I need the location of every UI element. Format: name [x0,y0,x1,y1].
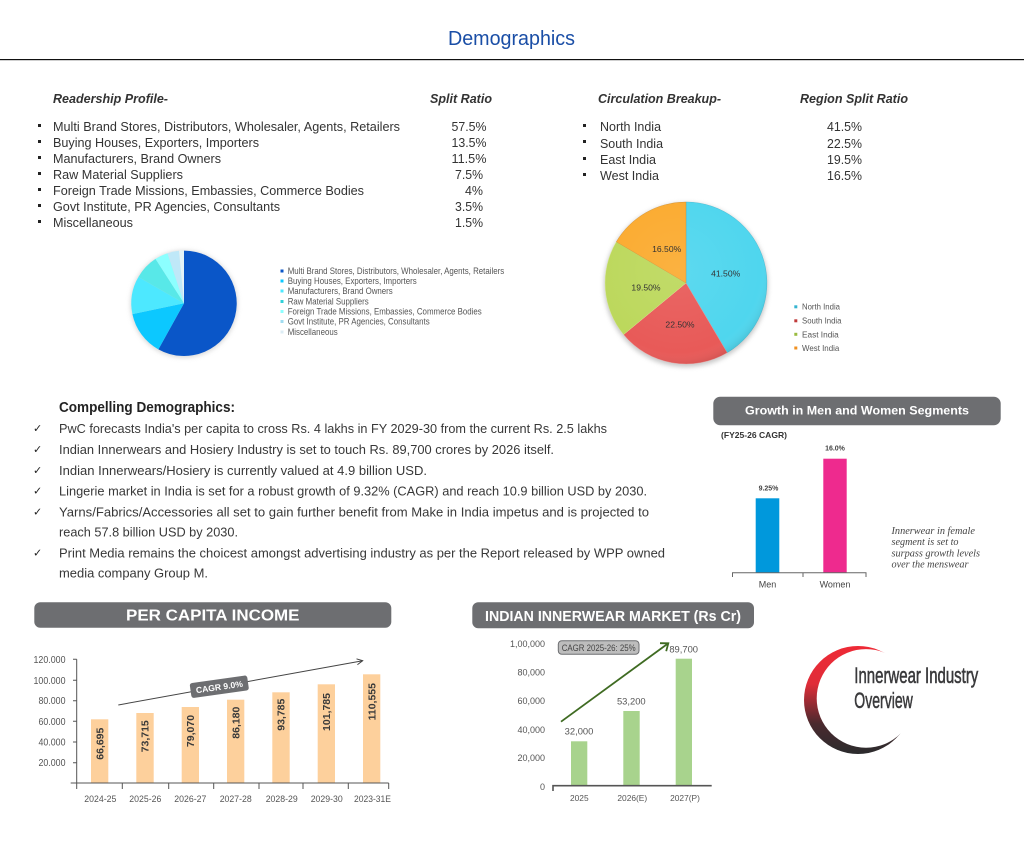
demographics text: PwC forecasts India's per capita to cross Rs. 4 lakhs in FY 2029-30 from the current Rs. 2.5 lakhs [59,421,607,436]
y axis labels: 120.000 [34,655,66,666]
y axis labels: 60,000 [517,696,545,706]
region values: 16.5% [827,169,862,183]
demographics text: Yarns/Fabrics/Accessories all set to gain further benefit from Make in India impetus and is projected to [59,505,649,520]
legend: circulation pie: North India [802,302,840,312]
y axis labels: 60.000 [38,717,66,728]
pie value labels: 41.50% [711,268,741,278]
y axis labels: 1,00,000 [510,639,545,649]
bar chart: men vs women: Men [759,580,776,590]
readership list: Multi Brand Stores, Distributors, Wholesaler, Agents, Retailers [53,120,400,134]
arrow: trend [118,661,363,705]
region list: North India [600,120,662,134]
readership list: Buying Houses, Exporters, Importers [53,136,259,150]
pie chart: circulation [604,202,768,367]
x axis labels: 2025 [570,793,589,803]
x axis labels: 2026-27 [174,794,206,804]
pie value labels: 19.50% [631,282,661,292]
panel: compelling demographics [33,400,665,580]
callout: CAGR 9.0%: CAGR 9.0% [195,679,244,695]
heading: compelling demographics: Compelling Demographics: [59,400,235,416]
y axis labels: 40,000 [517,725,545,735]
check marks: ✓ [33,422,42,435]
legend: circulation pie [794,302,842,353]
rotated bar values: 101,785 [321,693,333,731]
y axis labels: 80.000 [38,696,66,707]
legend: circulation pie: West India [802,343,839,353]
demographics text: media company Group M. [59,565,208,580]
bar chart: men vs women: 16.0% [825,446,846,452]
bar chart: per capita income [34,655,391,804]
legend: readership pie: Buying Houses, Exporters, Importers [288,276,417,286]
region list: South India [600,137,664,151]
split ratio values [452,120,486,230]
title: Demographics [448,28,575,50]
bar values: 53,200 [617,696,646,707]
rotated bar values [94,683,378,760]
region values [827,120,862,183]
x axis labels: 2026(E) [617,793,647,803]
readership list: Raw Material Suppliers [53,168,183,182]
region list: East India [600,153,657,167]
heading bar: indian innerwear market: INDIAN INNERWEAR MARKET (Rs Cr) [485,609,741,625]
demographics text: reach 57.8 billion USD by 2030. [59,525,238,540]
callout: CAGR 2025-26 [558,641,639,654]
legend: readership pie: Miscellaneous [288,327,338,337]
arrow: growth [561,643,668,722]
heading: readership profile: Readership Profile- [53,92,168,106]
x axis labels: 2029-30 [311,794,343,804]
region list [600,120,664,183]
region list: West India [600,169,660,183]
panel: readership profile [38,92,492,230]
callout: CAGR 9.0% [190,675,249,698]
heading bar: per capita income [34,602,391,628]
check marks: ✓ [33,464,42,477]
demographics text: Print Media remains the choicest amongst advertising industry as per the Report released by WPP owned [59,546,665,561]
bar chart: men vs women: Women [820,580,850,590]
callout: female segment note: segment is set to [892,537,958,548]
heading: circulation breakup: Circulation Breakup- [598,92,721,106]
heading bar: indian innerwear market [472,602,754,628]
y axis labels: 20.000 [38,758,66,769]
readership list: Govt Institute, PR Agencies, Consultants [53,200,280,214]
panel: indian innerwear market [472,602,754,803]
split ratio values: 1.5% [455,216,483,230]
callout: female segment note [891,526,980,570]
demographics text: Indian Innerwears and Hosiery Industry is set to touch Rs. 89,700 crores by 2026 itself. [59,442,554,457]
pie chart: readership [130,250,238,358]
x axis labels: 2027-28 [220,794,252,804]
region values: 22.5% [827,137,862,151]
rotated bar values: 66,695 [94,727,106,760]
bar values [565,643,698,736]
y axis labels: 100.000 [34,676,66,687]
x axis labels [84,794,391,804]
y axis labels: 40.000 [38,738,66,748]
chart subtitle: (FY25-26 CAGR) [721,431,787,440]
heading: split ratio: Split Ratio [430,92,492,106]
callout: female segment note: Innerwear in female [891,526,975,537]
bullet squares [583,124,586,176]
rotated bar values: 86,180 [230,706,242,739]
legend: readership pie: Raw Material Suppliers [288,296,369,306]
rotated bar values: 110,555 [366,683,378,720]
bullet squares [38,124,41,223]
legend: circulation pie: East India [802,329,839,339]
heading bar: per capita income: PER CAPITA INCOME [126,608,300,624]
callout: CAGR 2025-26: CAGR 2025-26: 25% [562,643,636,653]
y axis labels: 80,000 [517,668,545,678]
x axis labels: 2024-25 [84,794,116,804]
demographics text [59,421,665,580]
rotated bar values: 73,715 [140,720,152,752]
demographics text: Lingerie market in India is set for a robust growth of 9.32% (CAGR) and reach 10.9 billion USD by 2030. [59,484,647,499]
icon: crescent [804,646,915,754]
y axis labels [510,639,545,792]
bars [571,659,692,785]
legend: readership pie: Govt Institute, PR Agencies, Consultants [288,317,430,327]
logo text [854,663,978,713]
x axis labels: 2027(P) [670,793,700,803]
pie value labels [631,244,741,329]
demographics text: Indian Innerwears/Hosiery is currently valued at 4.9 billion USD. [59,463,427,478]
legend: readership pie: Manufacturers, Brand Owners [288,286,393,296]
x axis labels [570,793,700,803]
check marks [33,422,42,560]
x axis labels: 2025-26 [129,794,161,804]
logo text: Overview [854,688,913,713]
check marks: ✓ [33,484,42,498]
bar values: 32,000 [565,725,593,736]
y axis labels: 0 [540,782,545,792]
callout: female segment note: over the menswear [892,560,969,570]
pie value labels: 16.50% [652,244,682,254]
region values: 19.5% [827,153,862,167]
panel: per capita income [34,602,391,804]
axes [71,659,389,789]
split ratio values: 3.5% [455,200,483,214]
split ratio values: 57.5% [452,120,486,134]
logo: innerwear industry overview [804,646,978,754]
readership list: Foreign Trade Missions, Embassies, Commerce Bodies [53,184,364,198]
readership list: Miscellaneous [53,216,133,230]
split ratio values: 4% [465,184,483,198]
axis [553,786,712,791]
pie value labels: 22.50% [665,319,695,329]
panel: circulation breakup [583,92,908,183]
split ratio values: 7.5% [455,168,483,182]
y axis labels [34,655,66,769]
bar chart: market size [510,639,712,803]
heading: region split ratio: Region Split Ratio [800,92,908,106]
region values: 41.5% [827,120,862,134]
heading bar: growth [713,397,1001,425]
readership list: Manufacturers, Brand Owners [53,152,221,166]
rotated bar values: 79,070 [185,715,197,747]
check marks: ✓ [33,546,42,560]
panel: growth in men and women segments [713,397,1001,590]
bar values: 89,700 [669,643,698,654]
bar chart: men vs women: 9.25% [759,486,779,492]
legend: readership pie: Multi Brand Stores, Distributors, Wholesaler, Agents, Retailers [288,266,505,276]
bar chart: men vs women [732,446,866,590]
split ratio values: 13.5% [452,136,486,150]
bars [91,674,380,783]
legend: readership pie: Foreign Trade Missions, Embassies, Commerce Bodies [288,306,482,316]
check marks: ✓ [33,443,42,456]
callout: female segment note: surpass growth levels [892,548,980,559]
rotated bar values: 93,785 [276,698,288,731]
y axis labels: 20,000 [517,753,545,763]
split ratio values: 11.5% [452,152,486,166]
readership list [53,120,400,230]
x axis labels: 2023-31E [354,794,391,804]
x axis labels: 2028-29 [266,794,298,804]
legend: circulation pie: South India [802,316,842,326]
check marks: ✓ [33,506,42,518]
legend: readership pie [280,266,505,337]
heading bar: growth: Growth in Men and Women Segments [745,406,969,418]
